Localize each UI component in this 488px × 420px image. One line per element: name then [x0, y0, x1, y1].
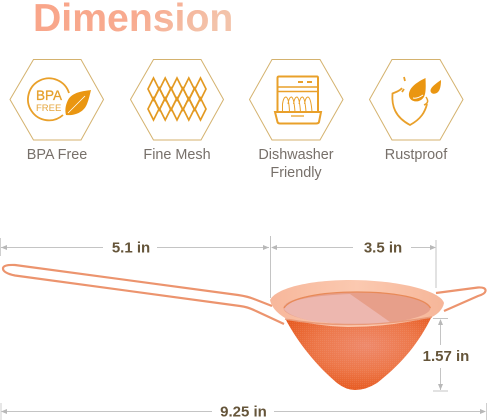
cone mesh	[286, 316, 432, 390]
dimension: 1.57 in: 1.57 in	[423, 348, 469, 365]
feature: Dishwasher Friendly: Friendly	[270, 165, 322, 181]
strainer photo	[3, 265, 486, 390]
feature: Fine Mesh	[130, 60, 224, 163]
rim	[270, 280, 444, 327]
label: Dishwasher	[258, 147, 334, 163]
icon: BPA free leaf: FREE	[36, 103, 61, 114]
dimension: 3.5 in	[271, 240, 436, 288]
inner mesh	[284, 292, 430, 324]
label: Fine Mesh	[143, 147, 211, 163]
dimension: 1.57 in	[423, 318, 469, 391]
hexagon frame	[10, 60, 104, 140]
dimension: 3.5 in: 3.5 in	[364, 240, 402, 256]
label: BPA Free	[27, 147, 87, 163]
dimension: 9.25 in: 9.25 in	[220, 404, 267, 420]
label: Rustproof	[385, 147, 448, 163]
icon: mesh	[148, 78, 206, 120]
hexagon frame	[130, 60, 224, 140]
icon: dishwasher	[275, 76, 321, 124]
feature: Dishwasher Friendly	[250, 60, 343, 181]
icon: BPA free leaf	[28, 78, 91, 120]
icon: shield and drops	[392, 77, 441, 125]
rim front edge	[285, 317, 432, 325]
feature: Rustproof	[370, 60, 463, 163]
dimension: 5.1 in: 5.1 in	[112, 240, 150, 256]
long handle	[3, 265, 284, 324]
side loop handle	[436, 287, 486, 311]
hexagon frame	[250, 60, 343, 140]
icon: BPA free leaf: BPA	[36, 88, 62, 103]
dimension: 5.1 in	[0, 236, 270, 298]
hexagon frame	[370, 60, 463, 140]
dimension: 9.25 in	[1, 403, 486, 420]
feature: BPA Free	[10, 60, 104, 163]
